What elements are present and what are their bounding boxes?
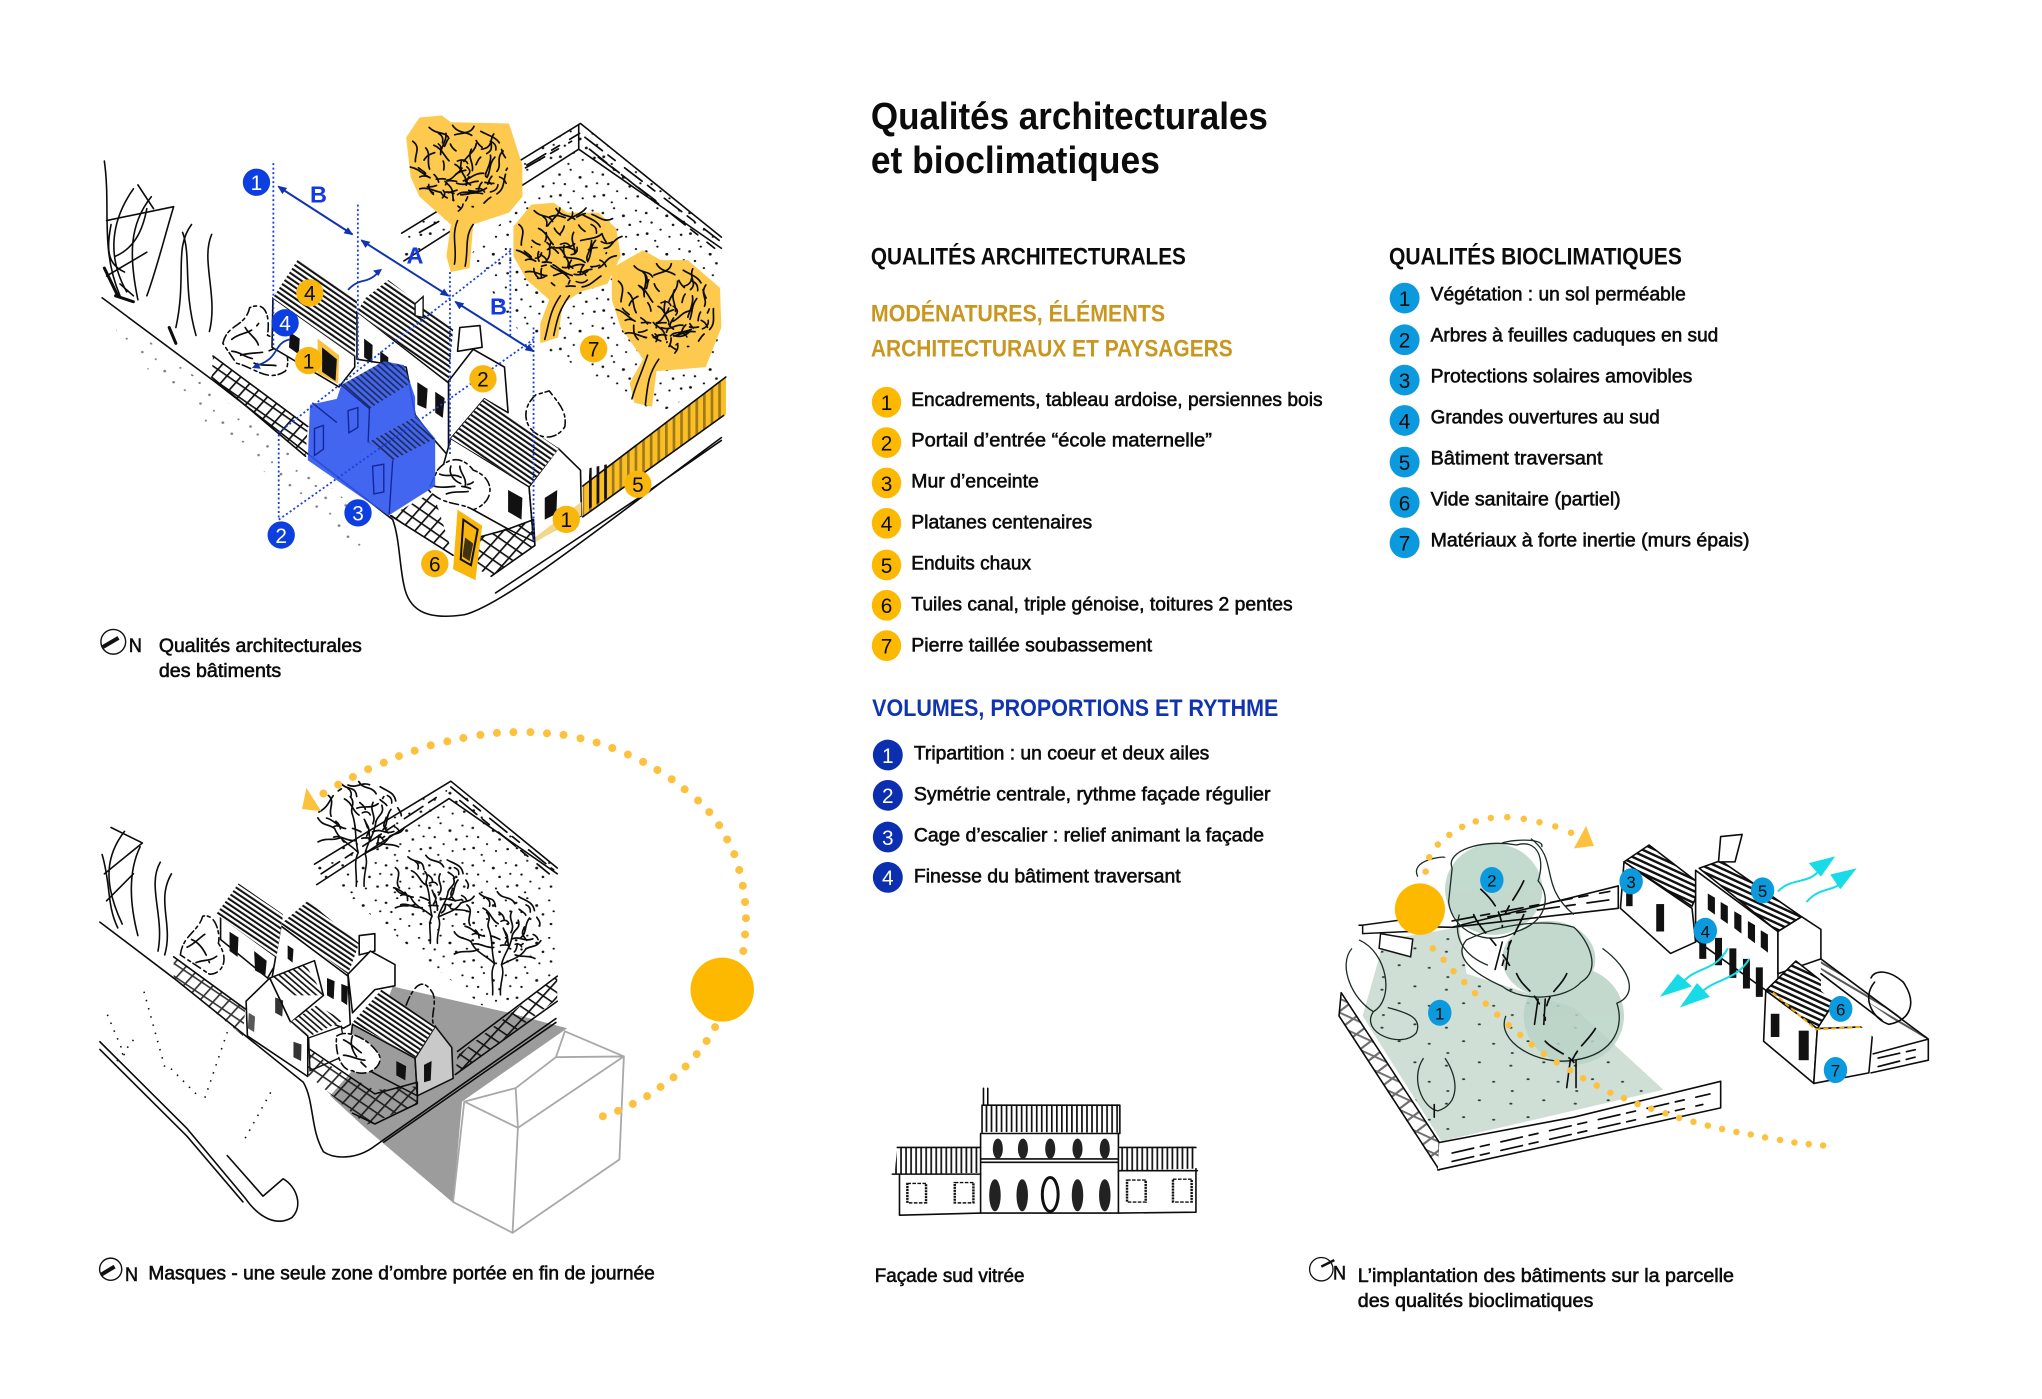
item 5: Enduits chaux: [911, 553, 1031, 575]
sun path: [1426, 817, 1823, 1145]
panel: qualités architecturales list: [871, 242, 1323, 661]
left wall: [1339, 993, 1439, 1170]
volume item 2: [873, 780, 1271, 811]
markers: 2: [275, 525, 287, 548]
bio item 2: 2: [1399, 330, 1410, 353]
item 5: [872, 550, 1031, 580]
markers: 2: [477, 369, 489, 392]
letter B: B: [310, 181, 327, 207]
bio item 2: [1390, 324, 1718, 355]
bio item 7: Matériaux à forte inertie (murs épais): [1431, 530, 1750, 552]
markers: 3: [1626, 873, 1636, 892]
stipple verges: [111, 312, 366, 553]
subheading: volumes: VOLUMES, PROPORTIONS ET RYTHME: [872, 695, 1278, 722]
item 6: Tuiles canal, triple génoise, toitures 2 pentes: [911, 594, 1293, 616]
letter B right: B: [490, 294, 507, 320]
markers: 5: [1758, 882, 1767, 901]
caption: implantation: des qualités bioclimatiques: [1358, 1290, 1594, 1312]
wing windows: [907, 1179, 1192, 1203]
item 2: 2: [881, 432, 892, 455]
markers: 6: [429, 553, 441, 576]
icon: north compass: N: [1333, 1263, 1346, 1285]
markers: 7: [1831, 1062, 1840, 1081]
volume item 1: [873, 740, 1210, 770]
bio item 4: Grandes ouvertures au sud: [1431, 407, 1660, 429]
item 4: [872, 508, 1092, 539]
item 3: Mur d’enceinte: [911, 471, 1039, 493]
item 1: 1: [881, 392, 892, 415]
blue construction lines: [273, 163, 534, 541]
grey cast shadow: [330, 987, 567, 1203]
volume item 4: 4: [882, 867, 894, 890]
volume item 2: 2: [882, 785, 894, 808]
letter A: A: [407, 243, 424, 269]
caption: masques: Masques - une seule zone d’ombre portée en fin de journée: [148, 1263, 655, 1285]
bio item 5: 5: [1399, 452, 1410, 475]
item 3: 3: [881, 473, 892, 496]
markers: 1: [1435, 1004, 1444, 1023]
subheading: modénatures: MODÉNATURES, ÉLÉMENTS: [871, 300, 1165, 328]
centre block: [357, 280, 508, 456]
front wall and gate: [308, 1034, 417, 1125]
icon: north compass: N: [129, 635, 142, 657]
subheading: modénatures: ARCHITECTURAUX ET PAYSAGERS: [871, 336, 1233, 363]
markers: 1: [251, 172, 262, 195]
bio item 7: 7: [1399, 533, 1410, 556]
item 4: 4: [881, 513, 892, 536]
bush and front fence: [212, 306, 308, 456]
item 7: [872, 630, 1153, 661]
right enclosure wall: [1821, 959, 1928, 1073]
boundary fence: [455, 976, 557, 1075]
central upper roof: [982, 1088, 1120, 1134]
back wall: [1359, 886, 1618, 957]
bio item 1: 1: [1399, 288, 1410, 311]
title: [871, 95, 1268, 181]
right wing: [348, 984, 453, 1096]
volume item 1: Tripartition : un coeur et deux ailes: [914, 743, 1210, 765]
markers: 1: [560, 509, 572, 532]
volume item 3: Cage d’escalier : relief animant la façade: [914, 825, 1264, 847]
markers: 4: [304, 283, 316, 306]
item 5: 5: [881, 555, 892, 578]
icon: north compass: N: [125, 1264, 138, 1286]
bio item 6: [1390, 487, 1621, 518]
volume item 3: [873, 822, 1264, 852]
dimension arrows: [252, 186, 534, 369]
central building: [1696, 834, 1821, 999]
central body: [981, 1134, 1118, 1213]
bio item 5: Bâtiment traversant: [1431, 448, 1603, 470]
blue central volume: [308, 361, 435, 516]
front wall and gate: [390, 460, 535, 580]
illustration: axonometric architectural qualities: [102, 116, 732, 616]
icon: north compass: [1310, 1257, 1346, 1285]
bio item 5: [1390, 447, 1603, 477]
markers: 7: [588, 339, 599, 362]
bio item 3: [1390, 365, 1693, 395]
garden wall: [314, 781, 557, 885]
green tree canopies: [1445, 844, 1624, 1064]
volume item 3: 3: [882, 827, 894, 850]
heading: qualités bioclimatiques: QUALITÉS BIOCLIMATIQUES: [1389, 242, 1682, 270]
yellow plane trees: [406, 116, 732, 407]
item 1: Encadrements, tableau ardoise, persiennes bois: [911, 389, 1323, 411]
sun: [1395, 883, 1445, 935]
illustration: shadow masks: [100, 732, 754, 1233]
item 6: 6: [881, 595, 892, 618]
markers: 2: [1487, 871, 1497, 890]
item 6: [872, 590, 1293, 621]
caption: implantation: [1310, 1257, 1734, 1312]
volume item 4: [873, 862, 1181, 893]
volume item 1: 1: [882, 745, 894, 768]
right building: [1764, 961, 1873, 1083]
left building: [1620, 845, 1701, 953]
caption: qualités architecturales des bâtiments: Qualités architecturales: [159, 635, 362, 657]
road and driveway: [100, 922, 556, 1221]
markers: [243, 169, 652, 577]
upper windows: [993, 1139, 1110, 1159]
item 2: Portail d’entrée “école maternelle”: [911, 429, 1212, 451]
right wing: [437, 391, 581, 542]
left bare trees: [104, 161, 212, 343]
panel: qualités bioclimatiques list: [1389, 242, 1750, 558]
stair cage: [246, 961, 346, 1076]
bare trees: [318, 782, 541, 995]
item 3: [872, 468, 1039, 498]
caption: implantation: L’implantation des bâtiments sur la parcelle: [1358, 1265, 1734, 1287]
left trees: [102, 828, 171, 955]
caption: qualités architecturales des bâtiments: [101, 629, 362, 682]
bio item 6: 6: [1399, 492, 1410, 515]
left wing: [272, 258, 357, 387]
volume item 2: Symétrie centrale, rythme façade régulier: [914, 784, 1271, 806]
front fence left: [174, 916, 245, 1036]
bio item 1: [1390, 283, 1686, 313]
bio item 7: [1390, 527, 1750, 558]
heading: qualités architecturales: QUALITÉS ARCHITECTURALES: [871, 242, 1186, 270]
bio item 4: 4: [1399, 410, 1410, 433]
ground floor openings: [989, 1178, 1111, 1211]
green ground: [1363, 927, 1663, 1141]
illustration: bioclimatic site plan: [1339, 817, 1928, 1170]
title: Qualités architecturales: [871, 95, 1268, 137]
item 7: Pierre taillée soubassement: [911, 635, 1153, 657]
sun path: [302, 732, 746, 1116]
markers: 6: [1836, 1000, 1845, 1019]
markers: 5: [632, 474, 644, 497]
markers: 4: [279, 313, 291, 336]
title: et bioclimatiques: [871, 139, 1160, 181]
bio item 3: 3: [1399, 370, 1410, 393]
caption: qualités architecturales des bâtiments: des bâtiments: [159, 660, 281, 682]
bio item 3: Protections solaires amovibles: [1431, 366, 1693, 388]
illustration: south facade: [892, 1088, 1197, 1215]
caption: façade sud vitrée: Façade sud vitrée: [875, 1265, 1024, 1287]
yellow boundary wall: [583, 377, 726, 517]
sun: [690, 958, 754, 1022]
bio item 2: Arbres à feuilles caduques en sud: [1431, 325, 1718, 347]
bio item 4: [1390, 405, 1660, 436]
neighbouring white house: [453, 1031, 624, 1233]
markers: [1428, 867, 1852, 1083]
bio item 6: Vide sanitaire (partiel): [1431, 489, 1621, 511]
volume item 4: Finesse du bâtiment traversant: [914, 866, 1181, 888]
markers: 3: [352, 503, 364, 526]
subheading: modénatures: [871, 300, 1233, 363]
bio item 1: Végétation : un sol perméable: [1431, 284, 1686, 306]
icon: north compass: [101, 629, 142, 657]
enclosure wall: [402, 123, 721, 261]
item 4: Platanes centenaires: [911, 512, 1092, 534]
ground lines: [899, 1169, 1196, 1215]
wing roofs: [892, 1147, 1197, 1174]
tree outlines: [1346, 839, 1629, 1117]
item 7: 7: [881, 635, 892, 658]
icon: north compass: [100, 1258, 138, 1286]
left and centre buildings: [216, 883, 395, 1028]
item 1: [872, 387, 1323, 418]
markers: 1: [303, 350, 314, 373]
road lines: [102, 298, 721, 616]
front wall: [1438, 1081, 1721, 1170]
panel: volumes list: [872, 695, 1278, 893]
garden stipple: [330, 797, 557, 1013]
item 2: [872, 427, 1212, 458]
garden stipple: [469, 141, 721, 415]
markers: 4: [1701, 922, 1710, 941]
cyan airflow arrows: [1660, 856, 1857, 1007]
